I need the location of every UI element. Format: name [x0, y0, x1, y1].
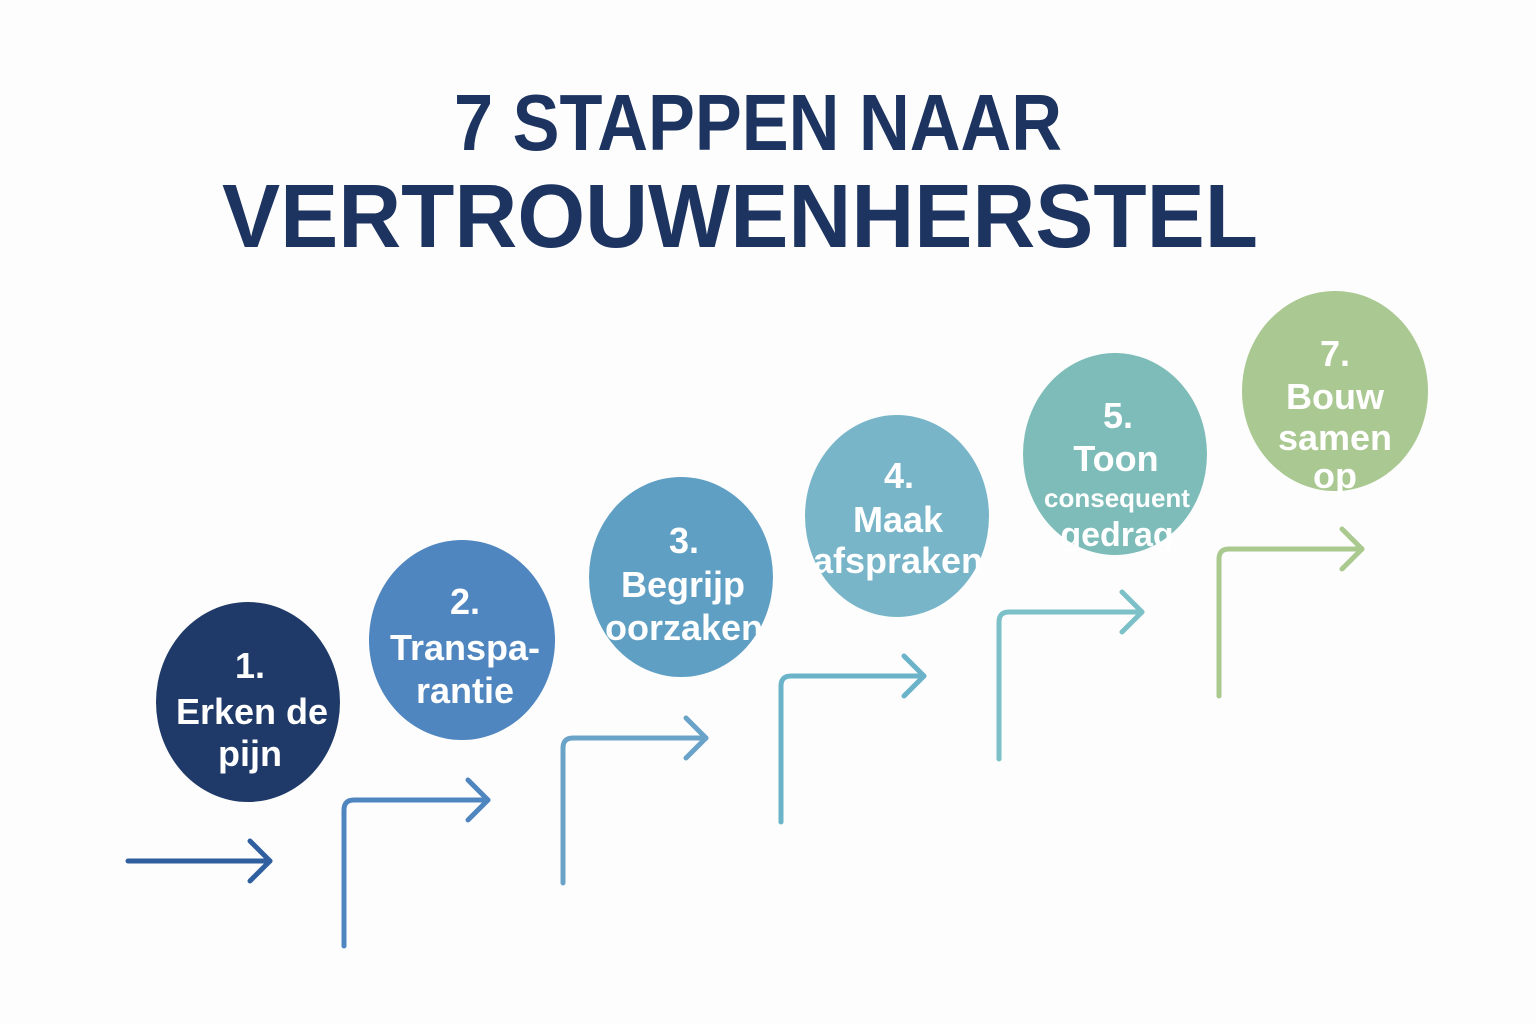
step 1 circle — [156, 602, 340, 802]
step 4 circle: Maak — [853, 499, 944, 540]
step 1 circle: Erken de — [176, 691, 328, 732]
arrow: start — [128, 841, 270, 881]
step 4 circle: afspraken — [813, 540, 983, 581]
step 1 circle: pijn — [218, 733, 282, 774]
step 5 circle: gedrag — [1060, 516, 1174, 554]
title: VERTROUWENHERSTEL — [222, 167, 1258, 267]
step 2 circle — [369, 540, 555, 740]
step 7 circle: op — [1313, 455, 1357, 496]
step 7 circle: Bouw — [1286, 376, 1385, 417]
step 3 circle: oorzaken — [605, 607, 763, 648]
step 4 circle — [805, 415, 989, 617]
step 2 circle: 2. — [450, 581, 480, 622]
step 4 circle: 4. — [884, 455, 914, 496]
title: 7 STAPPEN NAAR — [454, 78, 1062, 167]
step 7 circle: samen — [1278, 417, 1392, 458]
arrow: step 3 to 4 — [781, 656, 924, 822]
arrow: step 1 to 2 — [344, 780, 488, 946]
step 3 circle — [589, 477, 773, 677]
arrow: step 2 to 3 — [563, 718, 706, 883]
title — [222, 78, 1258, 267]
step 2 circle: rantie — [416, 670, 514, 711]
step 5 circle: consequent — [1044, 483, 1190, 513]
step 1 circle: 1. — [235, 645, 265, 686]
step 5 circle: 5. — [1103, 395, 1133, 436]
step 3 circle: 3. — [669, 520, 699, 561]
step 7 circle: 7. — [1320, 333, 1350, 374]
step 5 circle — [1023, 353, 1207, 555]
step 5 circle: Toon — [1073, 438, 1159, 479]
step 3 circle: Begrijp — [621, 564, 745, 605]
arrow: step 5 to 7 — [1219, 529, 1362, 696]
step 7 circle — [1242, 291, 1428, 496]
step 2 circle: Transpa- — [390, 627, 540, 668]
arrow: step 4 to 5 — [999, 592, 1142, 759]
